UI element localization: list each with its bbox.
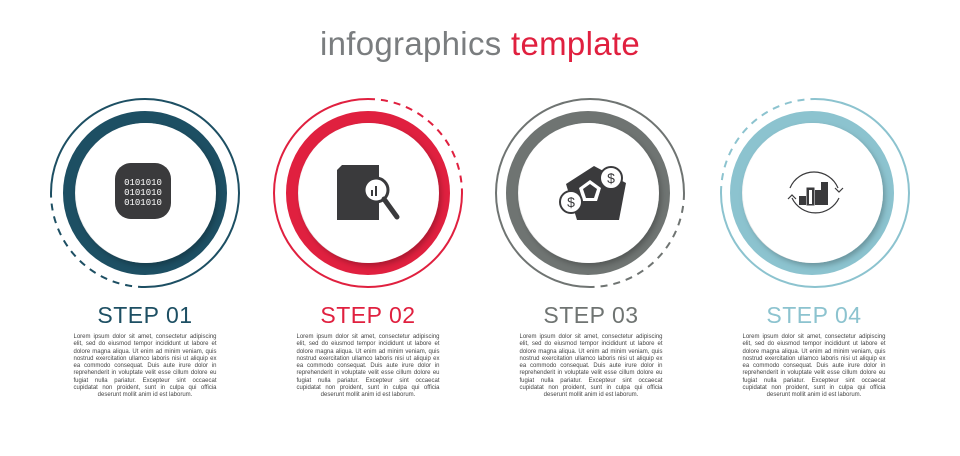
step 3 text: STEP 03 [543, 302, 639, 328]
icon: pentagon money [560, 166, 626, 220]
circle 3 [496, 99, 684, 287]
icon: document search [337, 165, 397, 220]
title: infographics template [320, 25, 640, 62]
icon: binary chip [115, 163, 171, 219]
icon: pentagon money: $ [567, 194, 575, 210]
icon: binary chip: 0101010 [124, 188, 162, 198]
step 4 text: Lorem ipsum dolor sit amet, consectetur adipiscing elit, sed do eiusmod tempor incididunt ut labore et dolore magna aliqua. Ut enim ad minim veniam, quis nostrud exercitation ullamco laboris nisi ut aliquip ex ea commodo consequat. Duis aute irure dolor in reprehenderit in voluptate velit esse cillum dolore eu fugiat nulla pariatur. Excepteur sint occaecat cupidatat non proident, sunt in culpa qui officia deserunt mollit anim id est laborum. [742, 334, 886, 398]
step 1 text: STEP 01 [97, 302, 193, 328]
circle 2 [274, 99, 462, 287]
circle 1 [51, 99, 239, 287]
icon: binary chip: 0101010 [124, 178, 162, 188]
step 2 text: Lorem ipsum dolor sit amet, consectetur adipiscing elit, sed do eiusmod tempor incididunt ut labore et dolore magna aliqua. Ut enim ad minim veniam, quis nostrud exercitation ullamco laboris nisi ut aliquip ex ea commodo consequat. Duis aute irure dolor in reprehenderit in voluptate velit esse cillum dolore eu fugiat nulla pariatur. Excepteur sint occaecat cupidatat non proident, sunt in culpa qui officia deserunt mollit anim id est laborum. [296, 334, 440, 398]
icon: refresh chart [788, 172, 843, 213]
circles graphic [50, 98, 910, 288]
step 1 text: Lorem ipsum dolor sit amet, consectetur adipiscing elit, sed do eiusmod tempor incididunt ut labore et dolore magna aliqua. Ut enim ad minim veniam, quis nostrud exercitation ullamco laboris nisi ut aliquip ex ea commodo consequat. Duis aute irure dolor in reprehenderit in voluptate velit esse cillum dolore eu fugiat nulla pariatur. Excepteur sint occaecat cupidatat non proident, sunt in culpa qui officia deserunt mollit anim id est laborum. [74, 334, 216, 398]
icon: binary chip: 0101010 [124, 198, 162, 208]
step 3 text [520, 302, 662, 398]
icon: pentagon money: $ [607, 170, 615, 186]
step 3 text: Lorem ipsum dolor sit amet, consectetur adipiscing elit, sed do eiusmod tempor incididunt ut labore et dolore magna aliqua. Ut enim ad minim veniam, quis nostrud exercitation ullamco laboris nisi ut aliquip ex ea commodo consequat. Duis aute irure dolor in reprehenderit in voluptate velit esse cillum dolore eu fugiat nulla pariatur. Excepteur sint occaecat cupidatat non proident, sunt in culpa qui officia deserunt mollit anim id est laborum. [520, 334, 662, 398]
step 4 text [742, 302, 886, 398]
step 1 text [74, 302, 216, 398]
circle 4 [721, 99, 909, 287]
step 2 text: STEP 02 [320, 302, 416, 328]
step 4 text: STEP 04 [766, 302, 862, 328]
step 2 text [296, 302, 440, 398]
